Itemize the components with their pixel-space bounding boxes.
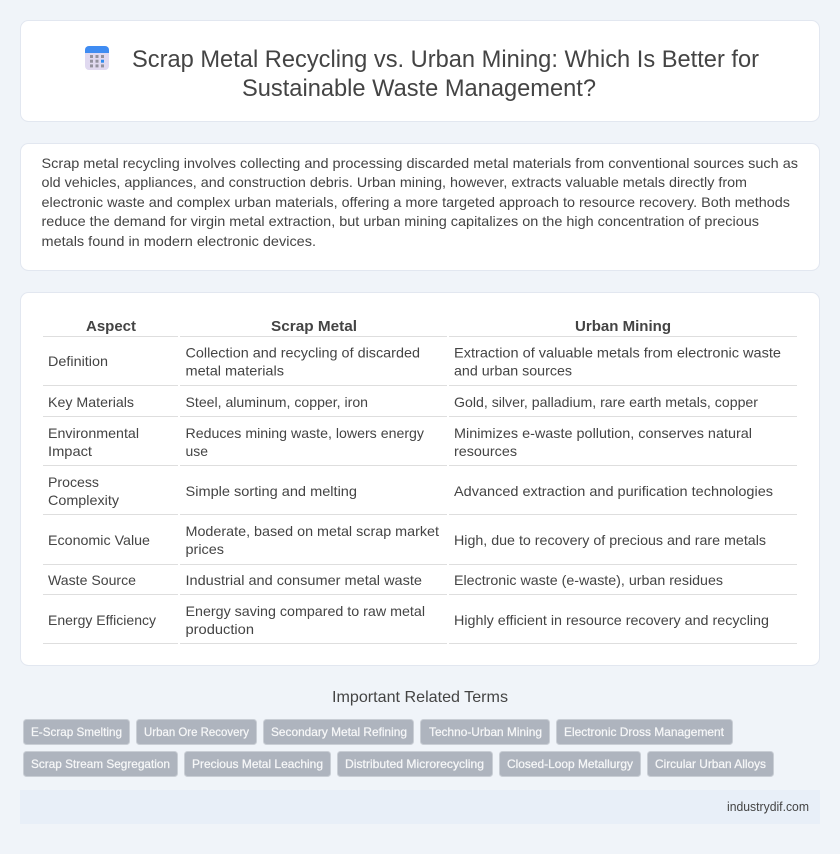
- row: process complexity: Complexity: [48, 492, 119, 508]
- row: economic value: Economic Value: [48, 532, 150, 548]
- row: definition: [48, 344, 781, 378]
- tag: [500, 752, 640, 776]
- row: key materials: Key Materials: [48, 394, 134, 410]
- text block: introduction paragraph: [42, 155, 798, 249]
- row: energy efficiency: [48, 603, 769, 637]
- tag: [556, 720, 732, 744]
- row: energy efficiency: production: [186, 621, 254, 637]
- tag: [420, 720, 550, 744]
- row: environmental impact: Reduces mining waste, lowers energy: [186, 425, 424, 441]
- title: Sustainable Waste Management?: [242, 75, 596, 102]
- title: [132, 46, 759, 102]
- tag: Precious Metal Leaching: [192, 757, 323, 771]
- row: definition: metal materials: [186, 362, 284, 378]
- row: environmental impact: Impact: [48, 443, 92, 459]
- tag: Closed-Loop Metallurgy: [507, 757, 633, 771]
- panel: title header: [20, 20, 820, 122]
- row: waste source: Electronic waste (e-waste), urban residues: [454, 572, 723, 588]
- text block: introduction paragraph: metals found in modern electronic devices.: [42, 233, 316, 249]
- tag: Circular Urban Alloys: [655, 757, 766, 771]
- footer bar: industrydif.com: [727, 799, 809, 814]
- row: environmental impact: Environmental: [48, 425, 139, 441]
- tag: [24, 752, 178, 776]
- tag: [24, 720, 130, 744]
- tag: Electronic Dross Management: [564, 725, 725, 739]
- row: definition: Extraction of valuable metals from electronic waste: [454, 344, 781, 360]
- row: economic value: [48, 523, 766, 557]
- panel: comparison table: [20, 292, 820, 666]
- tag: Distributed Microrecycling: [345, 757, 484, 771]
- panel: introduction: [20, 144, 820, 270]
- icon: calendar grid: [85, 46, 109, 70]
- text block: introduction paragraph: Scrap metal recycling involves collecting and processing discarded metal materials from conventional sources such as: [42, 155, 798, 171]
- row: process complexity: Advanced extraction and purification technologies: [454, 483, 773, 499]
- row: energy efficiency: Energy Efficiency: [48, 612, 156, 628]
- table header: Urban Mining: [575, 318, 671, 335]
- row: environmental impact: use: [186, 443, 208, 459]
- row: definition: and urban sources: [454, 362, 572, 378]
- text block: introduction paragraph: reduce the demand for virgin metal extraction, but urban mining capitalizes on the high concentration of precious: [42, 213, 759, 229]
- title: Scrap Metal Recycling vs. Urban Mining: Which Is Better for: [132, 46, 759, 73]
- row: environmental impact: resources: [454, 443, 517, 459]
- row: economic value: prices: [186, 541, 224, 557]
- tag: Urban Ore Recovery: [144, 725, 249, 739]
- tag: [264, 720, 414, 744]
- table header: [86, 318, 671, 335]
- row: waste source: Industrial and consumer metal waste: [186, 572, 422, 588]
- row: key materials: Gold, silver, palladium, rare earth metals, copper: [454, 394, 758, 410]
- tag: [338, 752, 492, 776]
- row: key materials: [48, 394, 758, 410]
- tag: Scrap Stream Segregation: [31, 757, 170, 771]
- row: waste source: Waste Source: [48, 572, 136, 588]
- tag: [136, 720, 256, 744]
- row: process complexity: [48, 474, 773, 508]
- table header: Aspect: [86, 318, 136, 335]
- tag: [184, 752, 330, 776]
- row: environmental impact: Minimizes e-waste pollution, conserves natural: [454, 425, 752, 441]
- table header: Scrap Metal: [271, 318, 357, 335]
- text block: introduction paragraph: electronic waste and complex urban materials, offering a more targeted approach to resource recovery. Both methods: [42, 194, 790, 210]
- row: energy efficiency: Highly efficient in resource recovery and recycling: [454, 612, 769, 628]
- tag list: related terms: [24, 720, 774, 776]
- row: energy efficiency: Energy saving compared to raw metal: [186, 603, 425, 619]
- tag: Techno-Urban Mining: [429, 725, 542, 739]
- row: definition: Definition: [48, 353, 108, 369]
- heading: important related terms: Important Related Terms: [332, 689, 508, 706]
- row: economic value: Moderate, based on metal scrap market: [186, 523, 439, 539]
- text block: introduction paragraph: old vehicles, appliances, and construction debris. Urban mining, however, extracts valuable metals directly from: [42, 174, 747, 190]
- tag: E-Scrap Smelting: [31, 725, 122, 739]
- footer bar: [20, 790, 820, 824]
- row: definition: Collection and recycling of discarded: [186, 344, 420, 360]
- row: key materials: Steel, aluminum, copper, iron: [186, 394, 368, 410]
- row: process complexity: Simple sorting and melting: [186, 483, 357, 499]
- row: waste source: [48, 572, 723, 588]
- tag: Secondary Metal Refining: [271, 725, 407, 739]
- row: economic value: High, due to recovery of precious and rare metals: [454, 532, 766, 548]
- row: process complexity: Process: [48, 474, 99, 490]
- row: environmental impact: [48, 425, 752, 459]
- tag: [648, 752, 774, 776]
